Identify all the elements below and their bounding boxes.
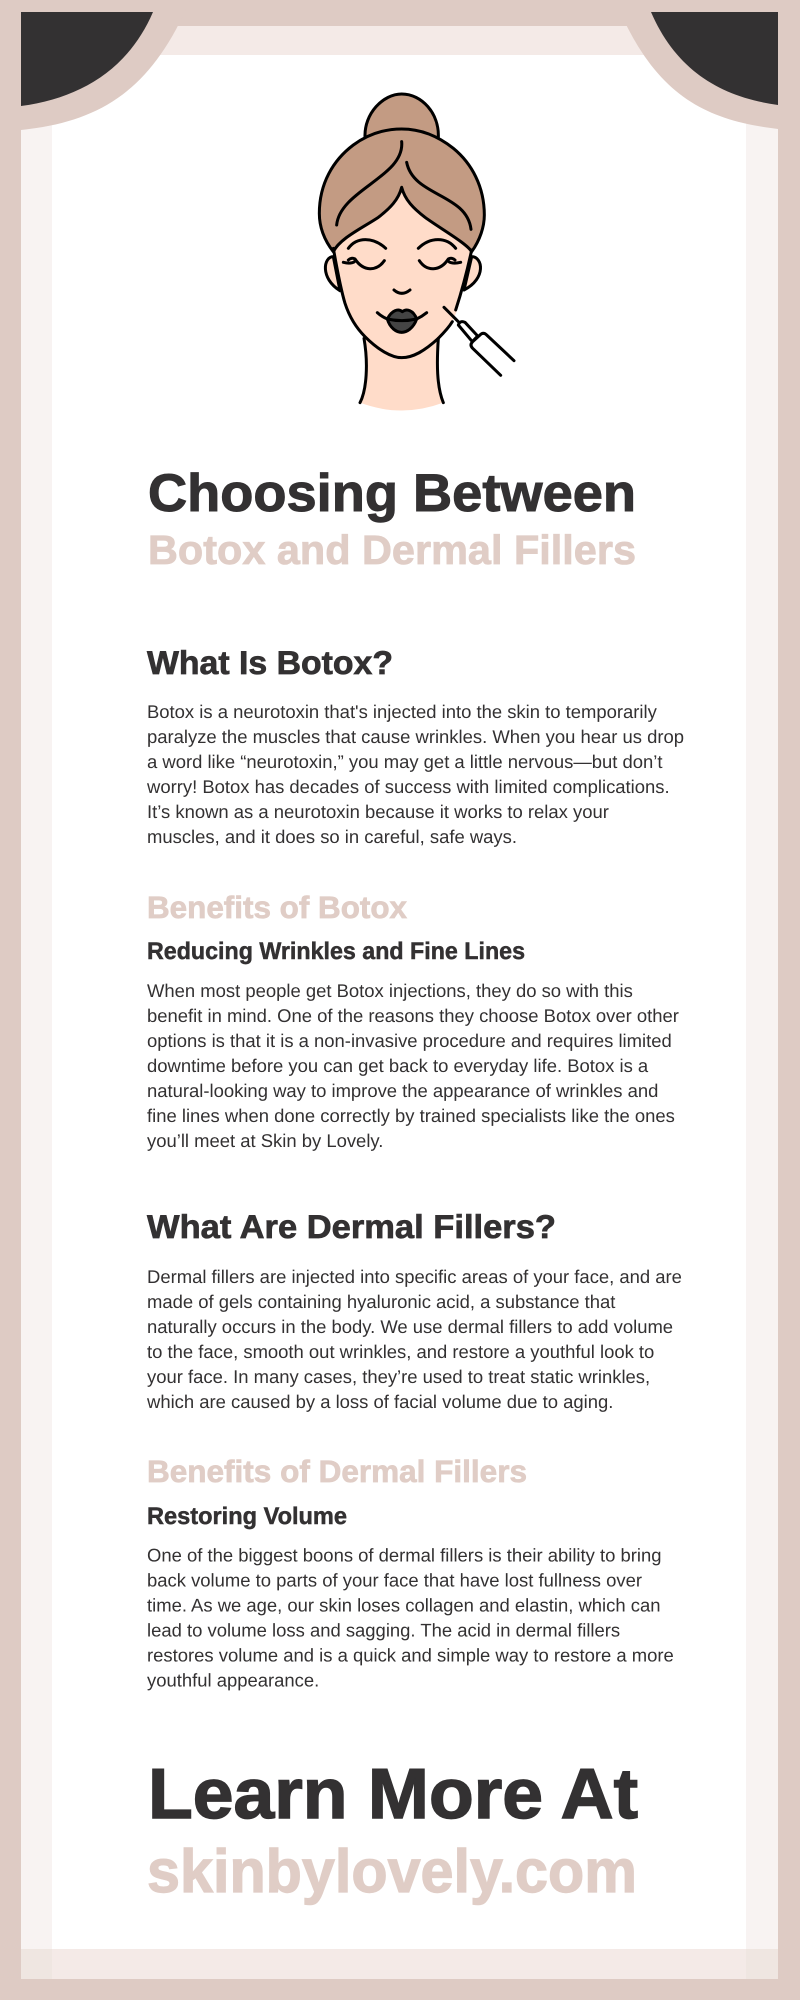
text block: Botox benefit xyxy=(147,980,679,1151)
text block: Botox benefit: you’ll meet at Skin by Lovely. xyxy=(147,1130,383,1151)
text block: dermal fillers description: Dermal fillers are injected into specific areas of your face, and are xyxy=(147,1266,682,1287)
text block: Botox benefit: fine lines when done correctly by trained specialists like the ones xyxy=(147,1105,675,1126)
text block: Botox benefit: benefit in mind. One of the reasons they choose Botox over other xyxy=(147,1005,679,1026)
text block: Botox description: Botox is a neurotoxin that's injected into the skin to temporarily xyxy=(147,701,658,722)
subheading: Restoring Volume: Restoring Volume xyxy=(147,1503,347,1530)
text block: Botox benefit: options is that it is a non-invasive procedure and requires limited xyxy=(147,1030,672,1051)
text block: Botox description: worry! Botox has decades of success with limited complications. xyxy=(146,776,670,797)
section: benefits of dermal fillers xyxy=(147,1454,674,1690)
text block: dermal fillers description: which are caused by a loss of facial volume due to aging. xyxy=(146,1391,613,1412)
text block: Botox description: a word like “neurotoxin,” you may get a little nervous—but don’t xyxy=(147,751,662,772)
text block: dermal fillers description xyxy=(146,1266,682,1412)
text block: fillers benefit: youthful appearance. xyxy=(147,1670,319,1690)
text block: Botox description: muscles, and it does so in careful, safe ways. xyxy=(147,826,517,847)
text block: Botox benefit: downtime before you can get back to everyday life. Botox is a xyxy=(147,1055,649,1076)
text block: fillers benefit xyxy=(147,1544,674,1690)
section: what is Botox xyxy=(146,644,684,847)
section: what are dermal fillers xyxy=(146,1208,682,1412)
text block: Botox description xyxy=(146,701,684,847)
text block: fillers benefit: lead to volume loss and sagging. The acid in dermal fillers xyxy=(147,1620,620,1640)
text block: fillers benefit: back volume to parts of your face that have lost fullness over xyxy=(147,1570,642,1590)
section: benefits of Botox xyxy=(147,890,679,1151)
text block: dermal fillers description: made of gels containing hyaluronic acid, a substance that xyxy=(147,1291,615,1312)
title: Choosing Between xyxy=(148,464,636,523)
illustration: woman's face receiving an injection xyxy=(319,94,514,410)
text block: dermal fillers description: to the face, smooth out wrinkles, and restore a youthful look to xyxy=(147,1341,654,1362)
text block: Botox description: It’s known as a neurotoxin because it works to relax your xyxy=(147,801,609,822)
footer call to action: skinbylovely.com xyxy=(147,1837,637,1905)
heading: What Is Botox?: What Is Botox? xyxy=(147,644,393,681)
text block: dermal fillers description: naturally occurs in the body. We use dermal fillers to add volume xyxy=(147,1316,673,1337)
text block: Botox benefit: natural-looking way to improve the appearance of wrinkles and xyxy=(147,1080,658,1101)
footer call to action: Learn More At xyxy=(148,1755,638,1834)
top-right corner ornament xyxy=(615,0,800,132)
text block: Botox benefit: When most people get Botox injections, they do so with this xyxy=(147,980,633,1001)
text block: Botox description: paralyze the muscles that cause wrinkles. When you hear us drop xyxy=(147,726,684,747)
text block: fillers benefit: One of the biggest boons of dermal fillers is their ability to bring xyxy=(147,1544,661,1566)
heading: What Are Dermal Fillers?: What Are Dermal Fillers? xyxy=(147,1208,556,1245)
heading: Benefits of Botox: Benefits of Botox xyxy=(147,890,408,925)
top-left corner ornament xyxy=(0,0,190,132)
text block: fillers benefit: restores volume and is a quick and simple way to restore a more xyxy=(147,1644,674,1666)
title: Botox and Dermal Fillers xyxy=(148,527,636,573)
title xyxy=(148,464,636,573)
footer call to action xyxy=(147,1755,638,1905)
subheading: Reducing Wrinkles and Fine Lines: Reducing Wrinkles and Fine Lines xyxy=(147,938,525,965)
text block: fillers benefit: time. As we age, our skin loses collagen and elastin, which can xyxy=(147,1594,660,1616)
heading: Benefits of Dermal Fillers: Benefits of Dermal Fillers xyxy=(147,1454,527,1489)
text block: dermal fillers description: your face. In many cases, they’re used to treat static wrinkles, xyxy=(147,1366,650,1387)
